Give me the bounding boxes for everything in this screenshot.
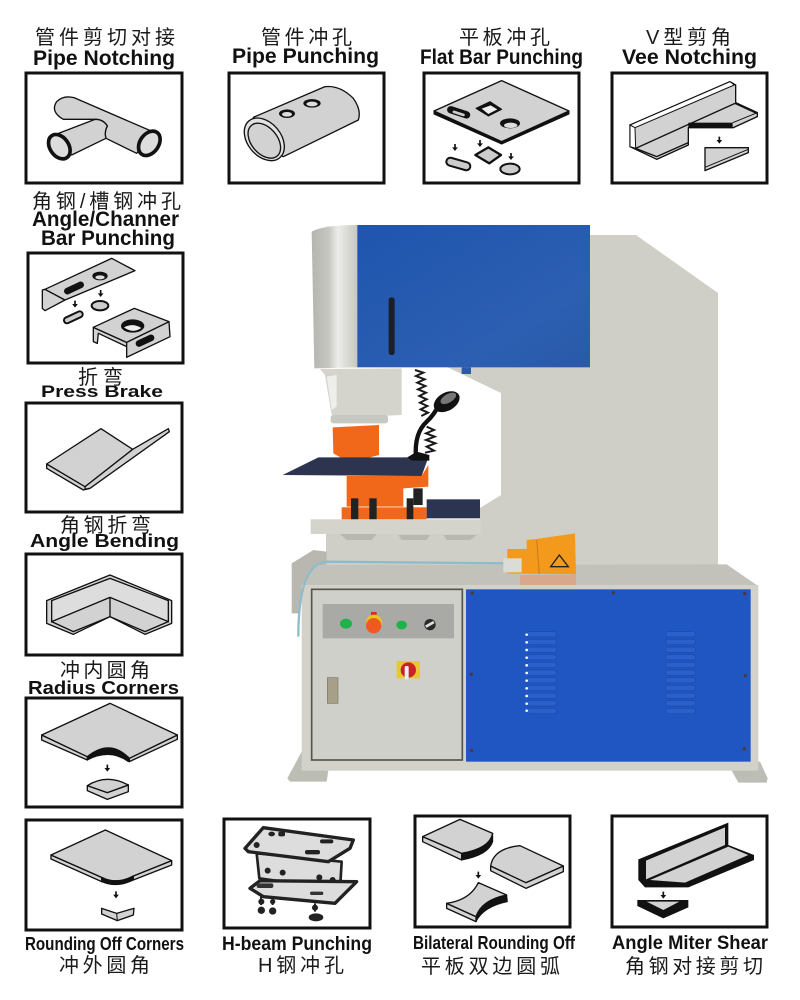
- icon: punched angle and channel: [42, 258, 170, 357]
- frame: pipe punching: [229, 73, 384, 183]
- left vent highlights: [525, 633, 528, 712]
- icon: punched h-beam: [245, 828, 357, 921]
- frame: pipe notching: [26, 73, 182, 183]
- heading: rounding off chinese: 冲外圆角: [59, 954, 150, 977]
- panel: angle channel bar punching: [28, 190, 183, 363]
- panel: press brake: [26, 366, 182, 512]
- dark bed plate: [427, 499, 480, 518]
- blue side panel: [466, 589, 751, 762]
- electrical door: [312, 589, 462, 760]
- door latch: [327, 678, 338, 703]
- cabinet top surface: [302, 564, 757, 585]
- frame: bilateral rounding: [415, 816, 570, 927]
- heading: pipe punching english: Pipe Punching: [232, 45, 379, 68]
- icon: notched angle iron: [630, 82, 757, 171]
- die bolts: [351, 488, 423, 519]
- air duct: [292, 550, 327, 613]
- panel: radius corners: [26, 659, 182, 807]
- punch table plate: [283, 457, 428, 476]
- cover slit: [389, 297, 395, 355]
- machine upper: punch head: [283, 225, 590, 549]
- panel: angle miter shear: [612, 816, 769, 978]
- heading: press brake chinese: 折弯: [78, 366, 123, 389]
- main power switch: [397, 661, 420, 679]
- frame: angle bending: [26, 554, 182, 655]
- machine: ironworker photo: [283, 225, 768, 783]
- foot pedal: [507, 533, 576, 574]
- column cover: [312, 225, 359, 368]
- icon: punched plate with slugs: [434, 81, 569, 174]
- ram housing: [320, 368, 402, 417]
- frame: flat bar punching: [424, 73, 579, 183]
- heading: pipe notching english: Pipe Notching: [33, 47, 175, 70]
- panel: flat bar punching: [420, 26, 583, 183]
- orange base: [342, 507, 427, 519]
- heading: angle channel english line two: Bar Punching: [41, 227, 175, 250]
- heading: pipe notching chinese: 管件剪切对接: [35, 26, 175, 49]
- left foot: [287, 752, 328, 782]
- coiled cable: [415, 370, 435, 453]
- machine base: cabinet: [287, 533, 768, 783]
- heading: vee notching english: Vee Notching: [622, 46, 757, 69]
- red and orange stop button: [366, 612, 382, 633]
- heading: rounding off english: Rounding Off Corners: [25, 934, 184, 954]
- heading: angle bending english: Angle Bending: [30, 531, 179, 551]
- green start button: [340, 619, 352, 629]
- panel: bilateral rounding off: [413, 816, 576, 978]
- heading: h-beam chinese: H钢冲孔: [258, 954, 344, 977]
- frame: press brake: [26, 403, 182, 512]
- panel: h-beam punching: [222, 819, 372, 977]
- icon: plate with inner radius: [42, 703, 177, 799]
- panel screws: [470, 591, 747, 752]
- heading: angle channel english line one: Angle/Channer: [32, 208, 179, 231]
- panel: rounding off corners: [25, 820, 184, 977]
- ledge shadow notches: [340, 534, 477, 540]
- left vent louvers: [527, 632, 557, 714]
- frame: radius corners: [26, 698, 182, 807]
- green indicator: [396, 621, 407, 629]
- frame: angle channel: [28, 253, 183, 363]
- ram highlight: [327, 375, 337, 410]
- panel: vee notching: [612, 26, 767, 183]
- icon: pipe with holes: [236, 86, 359, 168]
- heading: angle miter chinese: 角钢对接剪切: [625, 955, 763, 978]
- heading: angle bending chinese: 角钢折弯: [60, 514, 151, 537]
- heading: flat bar punching english: Flat Bar Punching: [420, 46, 583, 69]
- panel: angle bending: [26, 514, 182, 655]
- heading: angle miter english: Angle Miter Shear: [612, 933, 769, 954]
- icon: bent angle: [47, 575, 172, 634]
- work lamp: [407, 387, 463, 461]
- heading: bilateral english: Bilateral Rounding Off: [413, 933, 576, 953]
- heading: vee notching chinese: V型剪角: [646, 26, 731, 49]
- heading: press brake english: Press Brake: [41, 382, 163, 401]
- frame: h-beam: [224, 819, 370, 928]
- icon: plate with rounded corner: [51, 830, 172, 921]
- selector switch: [424, 619, 436, 630]
- heading: pipe punching chinese: 管件冲孔: [261, 26, 352, 49]
- icon: bent sheet: [47, 429, 169, 490]
- orange punch holder: [333, 425, 379, 460]
- heading: flat bar punching chinese: 平板冲孔: [459, 26, 550, 49]
- ram collar: [331, 415, 388, 423]
- icon: tee pipe: [44, 97, 165, 163]
- heading: h-beam english: H-beam Punching: [222, 934, 372, 955]
- heading: radius corners chinese: 冲内圆角: [60, 659, 150, 682]
- frame: rounding off corners: [26, 820, 182, 930]
- pedal reflection: [520, 575, 576, 585]
- orange die block: [347, 465, 428, 507]
- icon: bilateral rounded plates: [423, 819, 563, 922]
- control plate: [323, 604, 454, 638]
- icon: mitered angle: [637, 823, 754, 918]
- blue upper cover: [357, 225, 590, 367]
- pedal connector: [503, 558, 522, 572]
- under ledge column: [327, 534, 527, 549]
- cabinet front: [302, 585, 758, 771]
- panel: pipe notching: [26, 26, 182, 183]
- panel: pipe punching: [229, 26, 384, 183]
- heading: bilateral chinese: 平板双边圆弧: [421, 955, 560, 978]
- table ledge: [311, 519, 481, 534]
- frame: vee notching: [612, 73, 767, 183]
- heading: angle channel chinese: 角钢/槽钢冲孔: [32, 190, 181, 213]
- right foot: [732, 762, 768, 783]
- right vent louvers: [666, 632, 696, 714]
- frame: angle miter: [612, 816, 767, 927]
- small blue stud: [462, 367, 471, 374]
- machine frame: c-frame body: [326, 235, 718, 566]
- air hose: [298, 562, 503, 637]
- heading: radius corners english: Radius Corners: [28, 678, 179, 698]
